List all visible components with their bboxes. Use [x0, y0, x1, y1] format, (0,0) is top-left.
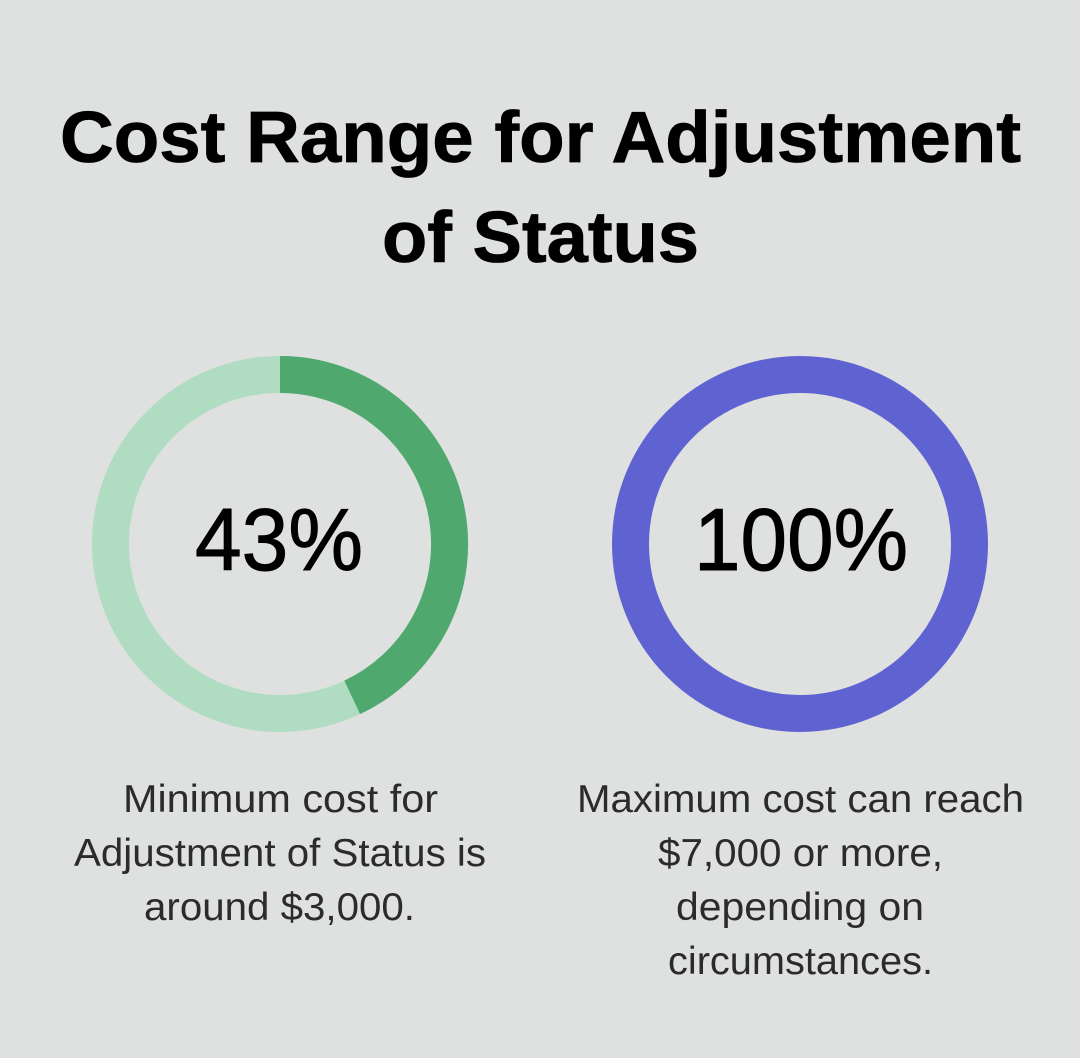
title: Cost Range for Adjustment — [60, 98, 1021, 178]
caption: minimum cost: Adjustment of Status is — [74, 832, 486, 875]
panel: minimum cost — [74, 374, 486, 929]
caption: minimum cost — [74, 778, 486, 929]
value: 43%: 43% — [195, 490, 363, 589]
panel: maximum cost — [577, 374, 1024, 983]
caption: minimum cost: around $3,000. — [144, 886, 415, 929]
caption: maximum cost — [577, 778, 1024, 983]
caption: maximum cost: Maximum cost can reach — [577, 778, 1024, 821]
donut chart: 43% — [110, 374, 450, 714]
title — [60, 98, 1021, 278]
caption: maximum cost: $7,000 or more, — [658, 832, 943, 875]
value: 100%: 100% — [694, 490, 908, 589]
caption: maximum cost: circumstances. — [668, 940, 933, 983]
title: of Status — [382, 198, 699, 278]
caption: maximum cost: depending on — [676, 886, 924, 929]
caption: minimum cost: Minimum cost for — [123, 778, 438, 821]
donut chart: 100% — [630, 374, 970, 714]
